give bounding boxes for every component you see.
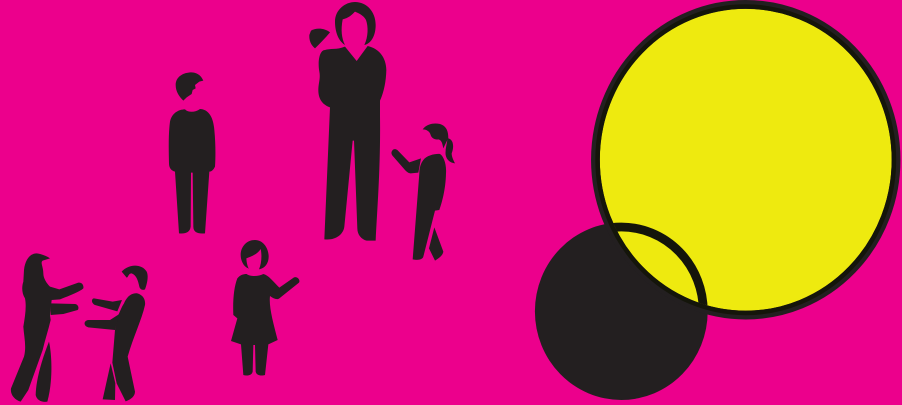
figure: woman reaching out: [11, 253, 83, 402]
figure: tall woman: [309, 2, 386, 241]
figure: girl with ponytail: [391, 124, 455, 261]
circle: overlap outline: [614, 222, 708, 306]
circle: large yellow: [595, 4, 896, 315]
figure: man standing: [169, 72, 215, 233]
figure: man reaching out: [85, 266, 148, 401]
figure: girl in dress: [231, 240, 299, 376]
circle: small dark: [535, 223, 708, 400]
